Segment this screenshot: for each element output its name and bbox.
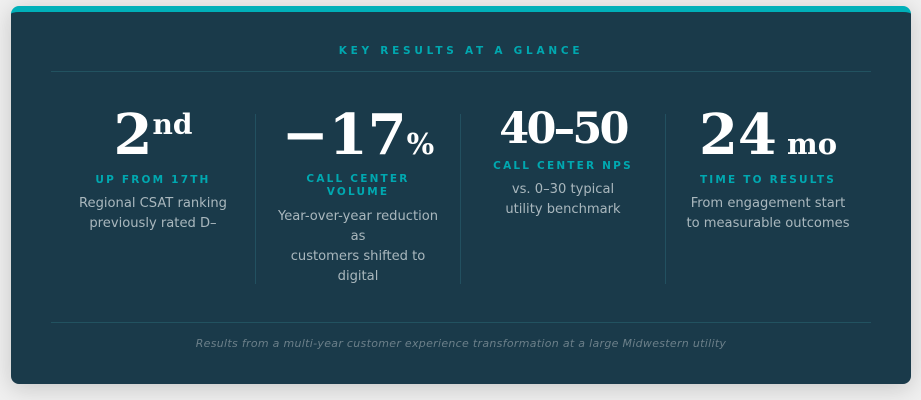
description: CSAT ranking: [79, 196, 227, 231]
description: volume reduction: as: [351, 229, 365, 244]
value: -17%: −17%: [282, 102, 434, 168]
stat: time to results: [686, 102, 850, 231]
description: volume reduction: digital: [338, 269, 378, 284]
stat: regional ranking: [79, 102, 227, 231]
description: volume reduction: [278, 209, 438, 284]
label: call center volume: [306, 173, 410, 198]
description: engagement timeline: to measurable outcomes: [686, 216, 850, 231]
label: time to results: TIME TO RESULTS: [700, 174, 836, 186]
stat: call center volume: [278, 102, 438, 284]
description: engagement timeline: [686, 196, 850, 231]
label: call center volume: CALL CENTER: [306, 173, 410, 185]
description: benchmark: vs. 0–30 typical: [512, 182, 614, 197]
value: 40-50: 40–50: [499, 104, 627, 154]
value: 24 mo: 24 mo: [699, 102, 837, 168]
value: 2nd: 2nd: [114, 102, 192, 168]
label: call center NPS: CALL CENTER NPS: [493, 160, 633, 172]
footnote: Results from a multi-year customer experience transformation at a large Midwestern utility: [196, 337, 726, 350]
description: volume reduction: Year-over-year reduction: [278, 209, 438, 224]
label: call center volume: VOLUME: [327, 186, 389, 198]
description: CSAT ranking: previously rated D–: [89, 216, 217, 231]
description: benchmark: [505, 182, 621, 217]
title: KEY RESULTS AT A GLANCE: [339, 45, 583, 57]
description: CSAT ranking: Regional CSAT ranking: [79, 196, 227, 211]
description: engagement timeline: From engagement start: [691, 196, 845, 211]
description: benchmark: utility benchmark: [505, 202, 621, 217]
stat: call center NPS: [493, 104, 633, 217]
label: up from 17th: UP FROM 17TH: [95, 174, 211, 186]
description: volume reduction: customers shifted to: [291, 249, 425, 264]
